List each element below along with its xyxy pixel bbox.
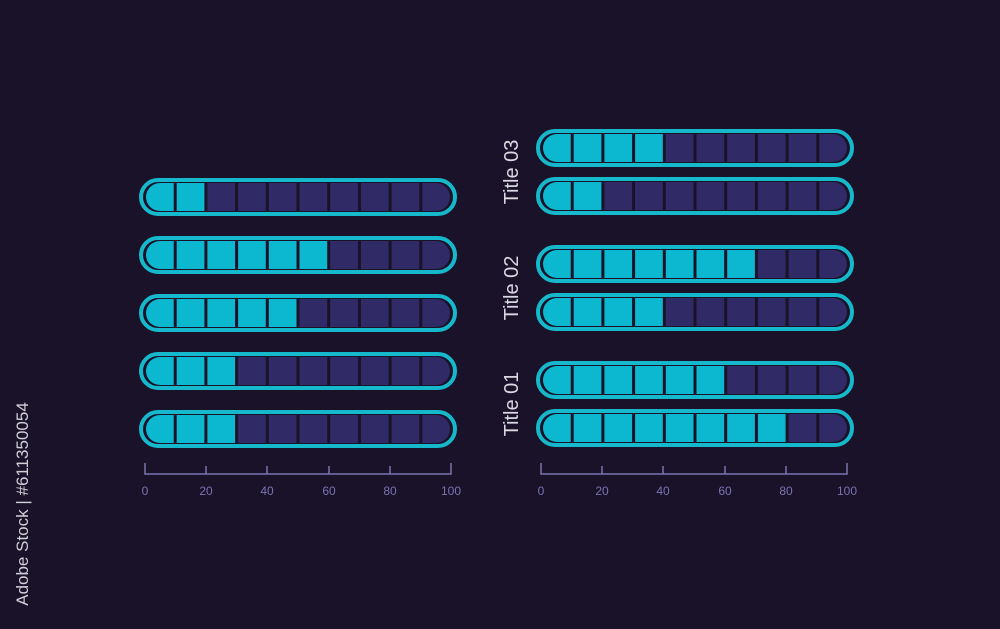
bar L4: 30 — [141, 354, 455, 388]
bar R3: 70 — [538, 247, 852, 281]
title 01: Title 01 — [501, 372, 523, 436]
axis right: 20 — [595, 484, 609, 498]
bar R5: 60 — [538, 363, 852, 397]
title 02: Title 02 — [501, 256, 523, 320]
stock id: Adobe Stock | #611350054 — [13, 402, 32, 606]
left chart — [141, 180, 461, 498]
bar L3: 50 — [141, 296, 455, 330]
bar R2: 20 — [538, 179, 852, 213]
bar R1: 40 — [538, 131, 852, 165]
axis right — [538, 463, 857, 498]
bar R6: 80 — [538, 411, 852, 445]
axis right: 40 — [656, 484, 670, 498]
axis left: 80 — [383, 484, 397, 498]
axis left: 60 — [322, 484, 336, 498]
axis left: 40 — [260, 484, 274, 498]
bar L5: 30 — [141, 412, 455, 446]
title 03: Title 03 — [501, 140, 523, 204]
axis left — [142, 463, 461, 498]
axis right: 100 — [837, 484, 857, 498]
axis right: 0 — [538, 484, 545, 498]
axis right: 80 — [779, 484, 793, 498]
bar L2: 60 — [141, 238, 455, 272]
axis left: 100 — [441, 484, 461, 498]
right chart — [501, 131, 857, 498]
bar R4: 40 — [538, 295, 852, 329]
axis right: 60 — [718, 484, 732, 498]
axis left: 0 — [142, 484, 149, 498]
bar L1: 20 — [141, 180, 455, 214]
axis left: 20 — [199, 484, 213, 498]
